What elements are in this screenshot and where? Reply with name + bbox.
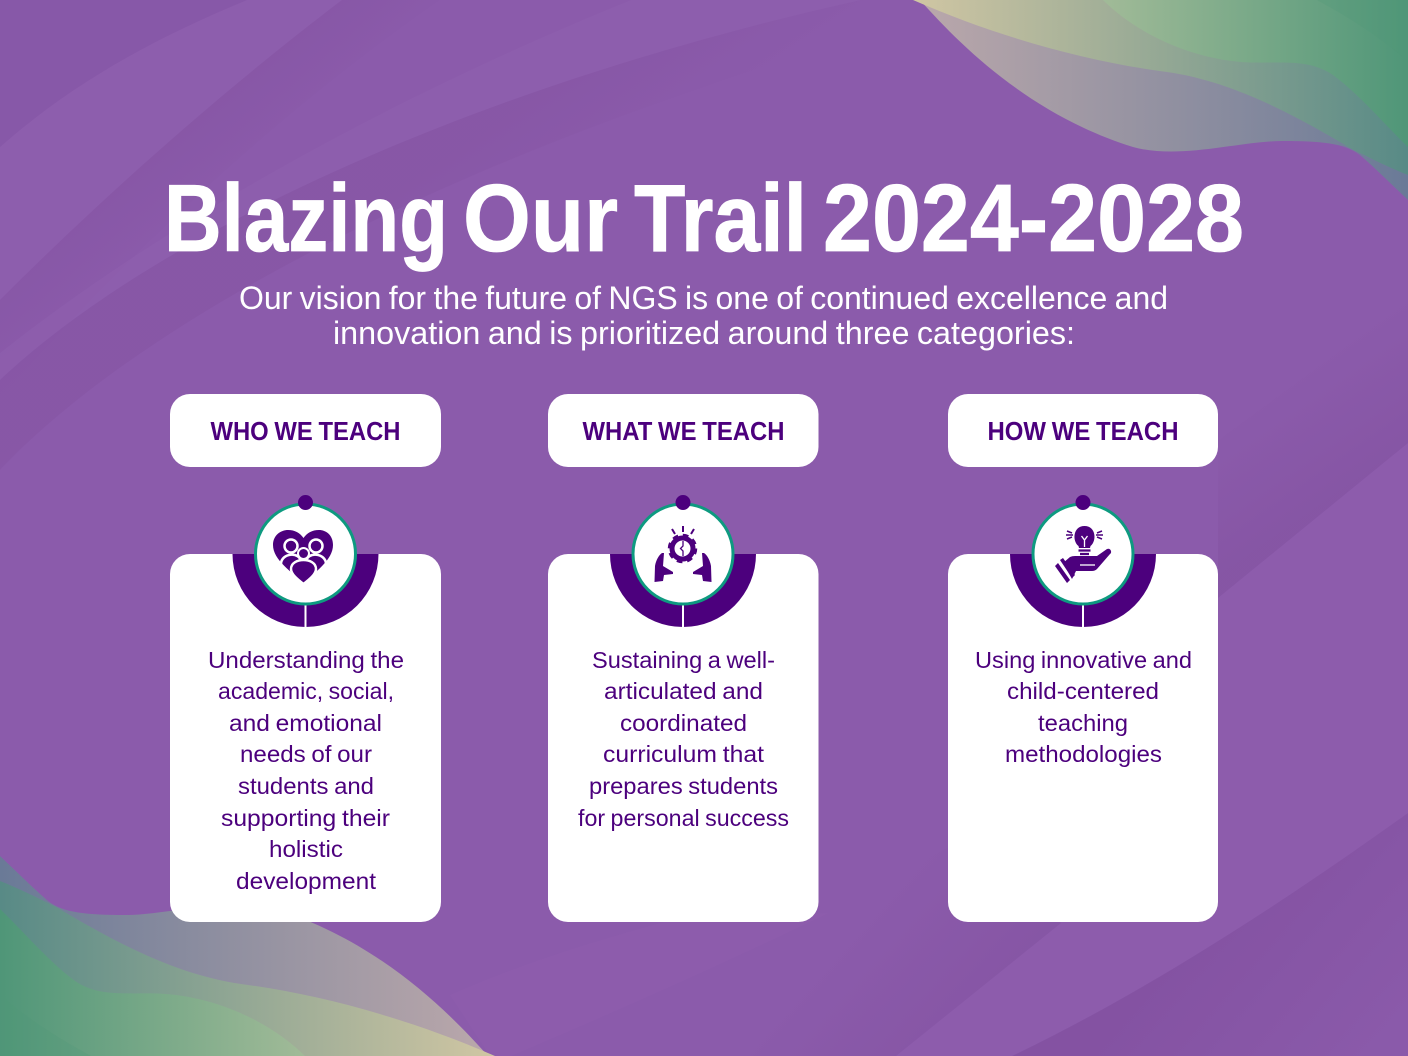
card: how we teach [948,554,1218,922]
heading: what we teach: WHAT WE TEACH [582,416,784,446]
card text: how we teach: Using innovative and [975,647,1192,673]
card text: who we teach: needs of our [240,741,372,767]
card text: who we teach: and emotional [229,710,382,736]
card text: how we teach [975,647,1192,767]
card text: what we teach: for personal success [578,805,789,831]
card text: what we teach: articulated and [604,678,763,704]
title: Blazing [164,165,448,272]
subtitle [239,280,1168,351]
icon badge: hand holding light bulb [1033,495,1133,604]
card text: who we teach [208,647,404,894]
panel: how we teach [948,394,1218,922]
card text: what we teach: Sustaining a well- [592,647,775,673]
card text: who we teach: supporting their [221,805,390,831]
heading: who we teach: WHO WE TEACH [210,416,400,446]
title: Our [463,165,618,272]
title: Trail [634,165,807,272]
decorative wave: bottom left [0,856,495,1056]
title: 2024-2028 [823,165,1244,272]
card text: what we teach: prepares students [589,773,778,799]
card text: who we teach: holistic [269,836,343,862]
card text: who we teach: students and [238,773,374,799]
icon badge: hands holding gear [633,495,733,604]
heading: who we teach [170,394,441,467]
panel: what we teach [548,394,818,922]
subtitle: Our vision for the future of NGS is one of continued excellence and [239,280,1168,316]
heading: how we teach: HOW WE TEACH [988,416,1178,446]
half ring [232,554,378,628]
card text: what we teach [578,647,789,831]
subtitle: innovation and is prioritized around three categories: [333,315,1075,351]
card text: what we teach: curriculum that [603,741,765,767]
card text: how we teach: child-centered [1007,678,1159,704]
card text: who we teach: Understanding the [208,647,404,673]
half ring [1010,554,1156,628]
card text: who we teach: development [236,868,377,894]
heading: how we teach [948,394,1218,467]
card text: how we teach: teaching [1038,710,1128,736]
heading: what we teach [548,394,818,467]
title [164,165,1244,272]
panel: who we teach [170,394,441,922]
half ring [610,554,756,628]
card text: who we teach: academic, social, [218,678,394,704]
card text: what we teach: coordinated [620,710,747,736]
decorative wave: top right [913,0,1408,200]
card text: how we teach: methodologies [1005,741,1162,767]
card: who we teach [170,554,441,922]
icon badge: heart with people [256,495,356,604]
card: what we teach [548,554,818,922]
